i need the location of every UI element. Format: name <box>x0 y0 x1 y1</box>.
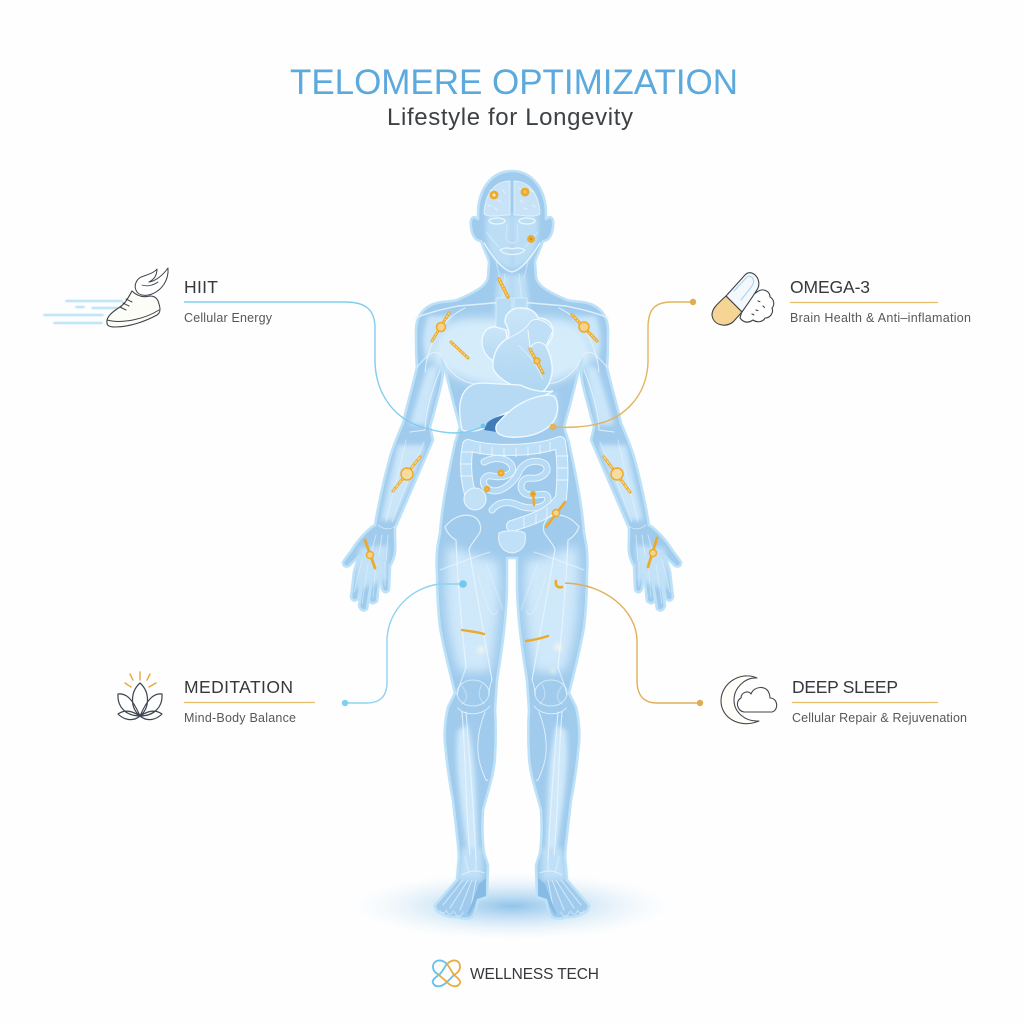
description: Cellular Repair & Rejuvenation <box>792 711 967 725</box>
marker: heart <box>530 349 543 373</box>
intestines <box>460 442 568 528</box>
icon: interlinked loops <box>433 960 460 986</box>
underline <box>790 302 938 304</box>
marker: right thigh node <box>556 581 562 587</box>
marker: right hand <box>648 538 657 567</box>
stomach gap <box>484 410 520 432</box>
bladder <box>499 531 525 553</box>
floor glow <box>352 872 672 940</box>
DNA telomere markers <box>365 189 657 641</box>
marker: brain right <box>522 189 528 195</box>
subtitle: Lifestyle for Longevity <box>387 104 633 131</box>
marker: left hand <box>365 540 375 568</box>
icon: moon and cloud <box>721 676 777 724</box>
human body figure <box>343 171 681 918</box>
panel: MEDITATION <box>118 672 315 725</box>
heading: MEDITATION <box>184 677 293 697</box>
marker: left thigh <box>462 630 484 634</box>
icon: lotus <box>118 672 162 720</box>
heart <box>482 298 553 393</box>
footer logo <box>433 960 599 986</box>
underline <box>184 702 315 704</box>
marker: left chest <box>451 342 468 358</box>
heading: DEEP SLEEP <box>792 677 898 697</box>
connector dots <box>342 299 703 706</box>
marker: neck <box>499 279 508 297</box>
marker: left shoulder <box>432 313 449 341</box>
panel: OMEGA-3 <box>712 273 971 325</box>
underline <box>792 702 938 704</box>
marker: right thigh <box>526 636 548 641</box>
marker: cheek <box>528 236 534 242</box>
title: TELOMERE OPTIMIZATION <box>290 63 738 102</box>
stomach <box>496 395 558 437</box>
marker: right forearm <box>604 457 630 492</box>
connector: Omega-3 <box>553 302 693 427</box>
marker: left forearm <box>393 457 420 491</box>
marker: brain left <box>491 192 497 198</box>
marker: colon <box>546 502 565 527</box>
heading: OMEGA-3 <box>790 277 870 297</box>
panel: DEEP SLEEP <box>721 676 967 725</box>
knee highlights <box>478 644 562 674</box>
liver <box>460 383 553 431</box>
connector: Meditation <box>345 584 463 703</box>
description: Mind-Body Balance <box>184 711 296 725</box>
markers: small intestine <box>485 471 535 505</box>
head and face <box>484 181 540 305</box>
connector: HIIT <box>184 302 483 433</box>
panel: HIIT <box>44 268 273 327</box>
description: Cellular Energy <box>184 311 273 325</box>
description: Brain Health & Anti–inflamation <box>790 311 971 325</box>
body silhouette <box>343 171 681 918</box>
marker: right shoulder <box>572 315 597 341</box>
icon: capsule and brain <box>712 273 774 325</box>
heading: HIIT <box>184 277 218 297</box>
brand name: WELLNESS TECH <box>470 966 599 983</box>
icon: winged shoe <box>44 268 168 327</box>
connector: Deep Sleep <box>565 583 700 703</box>
